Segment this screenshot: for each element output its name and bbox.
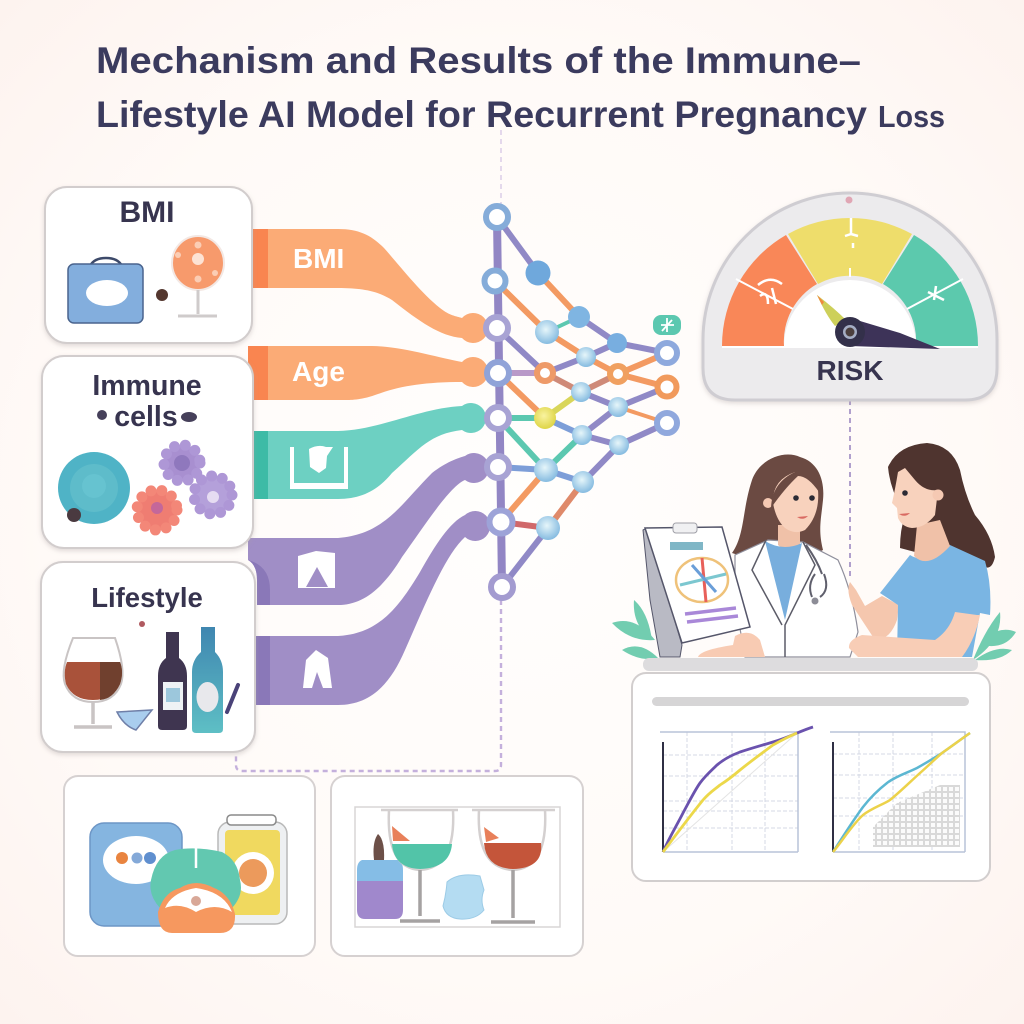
icon: pen — [227, 685, 238, 712]
title: Loss — [878, 99, 945, 134]
ribbon: purple upper — [248, 453, 489, 605]
icon: small dish — [117, 710, 152, 730]
gauge: inner white hub area — [784, 280, 916, 346]
chart: left ROC — [660, 727, 813, 852]
network nodes: hidden layers — [526, 260, 629, 540]
icon: teal and orange pouch — [150, 848, 241, 933]
panel: BMI card — [45, 187, 252, 343]
ribbon: Age: Age — [292, 356, 345, 387]
illustration: doctor hand — [698, 633, 765, 657]
gauge — [703, 193, 997, 400]
panel: immune cells card — [42, 356, 253, 548]
gauge: orange segment — [722, 235, 817, 346]
panel: lifestyle card — [41, 562, 255, 752]
illustration: desk — [643, 658, 978, 671]
title: Mechanism and Results of the Immune– — [96, 39, 861, 81]
illustration: clipboard — [643, 523, 750, 657]
illustration: doctor — [732, 455, 858, 657]
heading: immune cells: cells — [114, 401, 178, 433]
title — [96, 39, 945, 135]
icon: teal glass — [381, 810, 458, 921]
leaves right — [973, 612, 1016, 660]
gauge ticks and icons — [736, 218, 963, 309]
network nodes: input layer — [484, 206, 677, 598]
panel: ROC charts — [632, 673, 990, 881]
ribbon: teal marker — [253, 403, 486, 499]
gauge needle — [817, 295, 940, 349]
icon: dark bean — [156, 289, 168, 301]
icon: dark bottle — [158, 632, 187, 730]
gauge: yellow segment — [788, 218, 912, 284]
network edges — [495, 217, 667, 587]
icon: teal cell — [58, 452, 130, 524]
icon: blue bottle — [192, 627, 223, 733]
chart: right ROC — [830, 732, 970, 852]
title: Lifestyle AI Model for Recurrent Pregnancy — [96, 93, 867, 135]
illustration: patient — [848, 443, 995, 657]
icon: wine glass — [64, 638, 123, 727]
ribbon: BMI — [252, 229, 488, 343]
icon: small teal badge — [653, 315, 681, 335]
icon: coral cell — [137, 490, 177, 530]
icon: orange globe — [172, 236, 224, 316]
ribbon: Age — [248, 346, 488, 400]
connector lines — [236, 130, 850, 771]
icon: purple cell right — [194, 476, 232, 514]
icon: blue pouch — [443, 875, 484, 919]
heading: BMI: BMI — [120, 196, 174, 229]
leaves left — [612, 600, 658, 659]
panel: bottom left — [64, 776, 315, 956]
heading: lifestyle: Lifestyle — [91, 582, 203, 613]
icon: purple bottle — [357, 834, 403, 919]
panel: bottom middle — [331, 776, 583, 956]
icon: red glass — [472, 810, 555, 922]
icon: purple cell top — [164, 445, 200, 481]
gauge label: RISK — [817, 355, 883, 386]
icon: yellow jar — [218, 815, 287, 924]
gauge: white center — [722, 346, 978, 348]
ribbon: BMI: BMI — [293, 243, 344, 274]
neural network — [484, 206, 681, 598]
ribbon: purple lower — [255, 511, 490, 705]
heading: immune cells: Immune — [92, 370, 202, 402]
icon: blue box — [90, 823, 182, 926]
gauge: green segment — [883, 235, 978, 346]
icon: scale bag — [68, 258, 143, 323]
icon: oval scale — [103, 836, 169, 884]
